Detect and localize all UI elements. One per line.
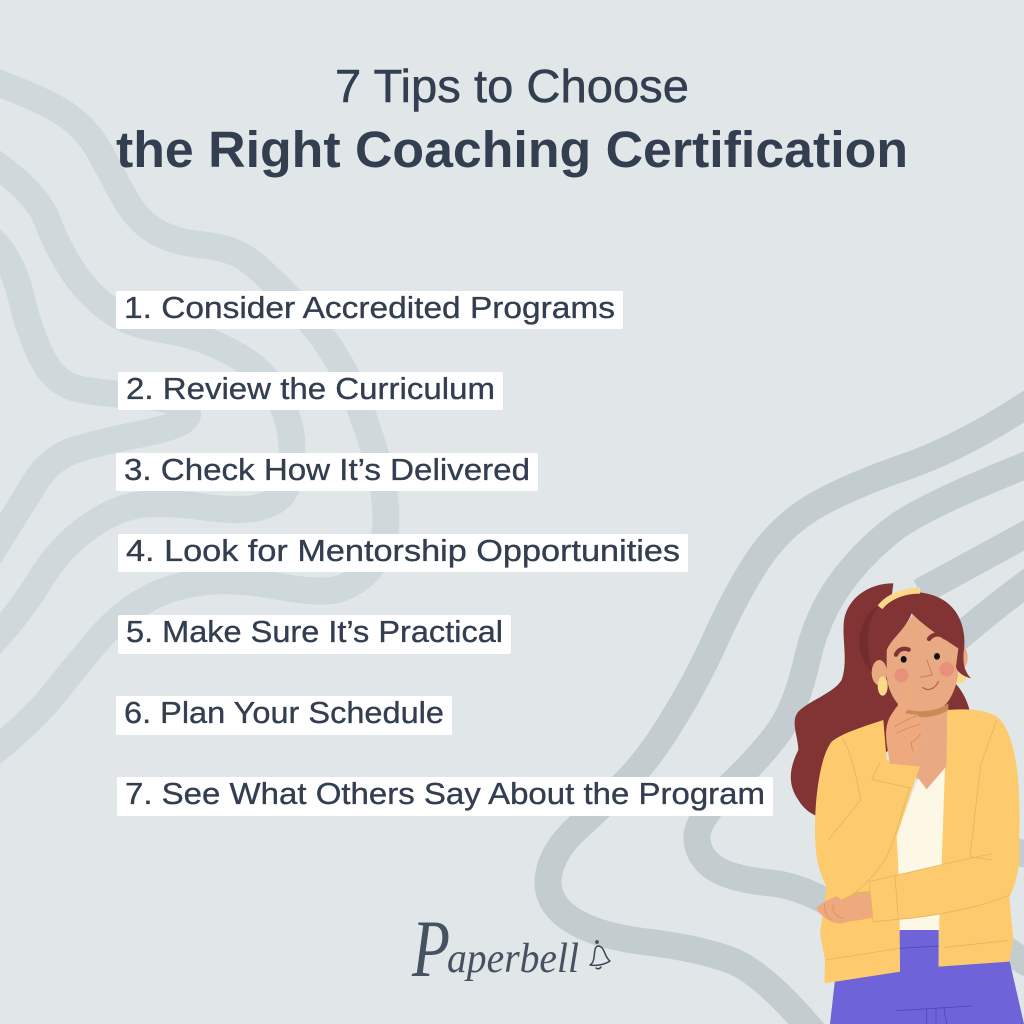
white top	[895, 767, 945, 932]
eyebrows	[896, 634, 945, 655]
finger lines	[895, 715, 921, 752]
cuff edge line	[872, 763, 912, 788]
nose and smile	[920, 659, 932, 677]
chin shadow	[905, 703, 948, 717]
neck	[903, 707, 947, 789]
headband	[880, 591, 920, 607]
pants	[830, 930, 1024, 1024]
jacket forearm	[869, 837, 1019, 922]
tip 6: 6. Plan Your Schedule	[124, 695, 444, 730]
hair back	[791, 583, 903, 816]
title line 2: the Right Coaching Certification	[116, 121, 908, 178]
title line 1: 7 Tips to Choose	[335, 60, 689, 112]
jacket seams	[825, 720, 1007, 960]
pants details	[896, 946, 972, 1024]
forearm edge lines	[869, 854, 1009, 922]
jacket left panel	[815, 720, 918, 983]
left ear	[872, 660, 887, 685]
eyes	[901, 653, 940, 663]
logo wordmark: aperbell	[447, 936, 579, 982]
right ear	[956, 646, 968, 669]
tip 4: 4. Look for Mentorship Opportunities	[126, 533, 680, 568]
title	[116, 60, 908, 178]
face	[887, 613, 961, 713]
lower hand	[817, 892, 874, 924]
hair strand	[859, 605, 880, 673]
tip 2: 2. Review the Curriculum	[126, 371, 495, 406]
right earring	[954, 673, 966, 683]
face details	[894, 634, 954, 689]
right hair wisp	[956, 648, 971, 678]
hair behind neck	[940, 680, 970, 713]
tip 1: 1. Consider Accredited Programs	[124, 290, 615, 325]
illustration: thinking woman	[791, 583, 1024, 1024]
jacket cuff	[872, 763, 920, 788]
logo wordmark: P	[411, 903, 450, 994]
tips list	[116, 290, 773, 816]
tip 5: 5. Make Sure It’s Practical	[126, 614, 503, 649]
left earring	[878, 676, 888, 696]
hand on chin	[886, 688, 923, 767]
tip 3: 3. Check How It’s Delivered	[124, 452, 530, 487]
sleeve edge line	[842, 788, 910, 900]
jacket right panel	[939, 709, 1019, 967]
cheeks	[894, 662, 954, 682]
jacket sleeve	[815, 783, 910, 900]
hand finger lines	[825, 903, 844, 920]
front hair	[868, 592, 964, 670]
tip 7: 7. See What Others Say About the Program	[125, 776, 765, 811]
icon: bell	[590, 941, 610, 969]
logo: Paperbell	[411, 903, 610, 994]
